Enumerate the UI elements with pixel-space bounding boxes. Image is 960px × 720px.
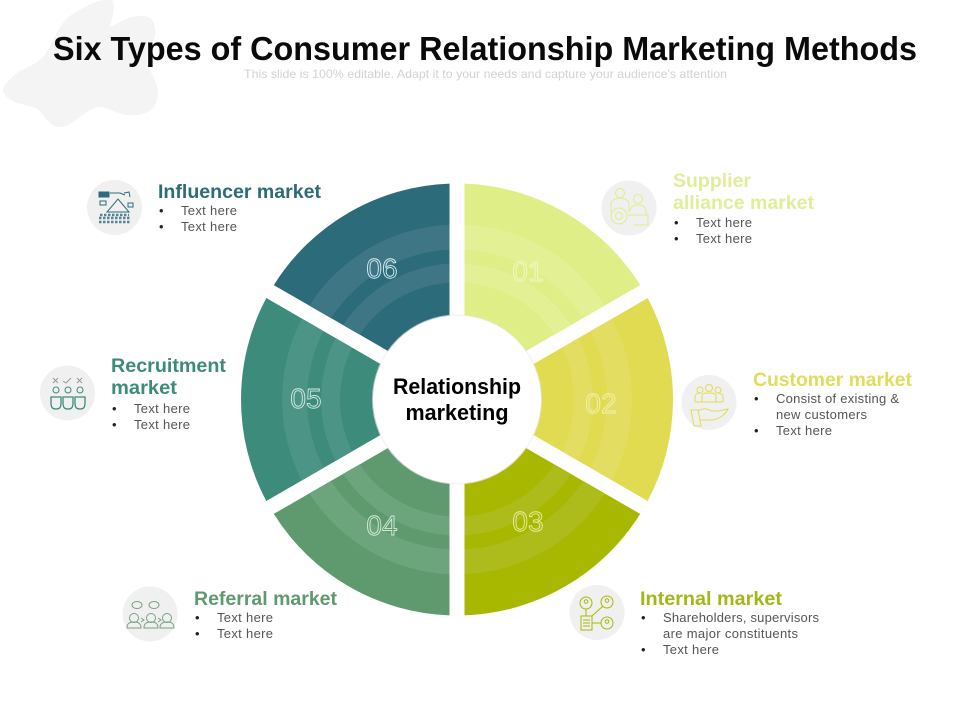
segment 03 — [377, 412, 640, 666]
icon: recruitment — [40, 366, 95, 420]
segment 05: 05 — [290, 383, 322, 414]
segment 01 — [464, 184, 640, 386]
text: internal: • — [641, 642, 646, 657]
segment 04 — [274, 412, 450, 615]
text: referral: • — [195, 626, 200, 641]
text: internal — [641, 610, 820, 657]
text: influencer: • — [159, 203, 164, 218]
text: supplier: Text here — [696, 231, 752, 246]
subtitle: This slide is 100% editable. Adapt it to your needs and capture your audience's attention — [244, 67, 727, 81]
heading: referral: Referral market — [194, 589, 338, 610]
text: supplier: • — [674, 215, 679, 230]
heading: recruitment: Recruitment — [111, 356, 227, 377]
text: recruitment — [112, 401, 190, 432]
icon: supplier — [602, 180, 656, 236]
text: customer: • — [754, 423, 759, 438]
text: supplier: • — [674, 231, 679, 246]
background blob — [3, 0, 158, 127]
text: referral: Text here — [217, 626, 273, 641]
center circle: Relationship — [393, 374, 521, 399]
text: supplier — [674, 215, 752, 246]
text: influencer: Text here — [181, 203, 237, 218]
title: Six Types of Consumer Relationship Marketing Methods — [53, 30, 917, 67]
text: referral — [195, 610, 273, 641]
text: influencer — [159, 203, 237, 234]
heading: supplier — [673, 171, 815, 214]
icon: referral — [122, 586, 178, 642]
heading: recruitment: market — [111, 378, 178, 399]
text: internal: are major constituents — [663, 626, 798, 641]
text: customer: Text here — [776, 423, 832, 438]
heading: supplier: Supplier — [673, 171, 752, 192]
text: customer — [754, 391, 899, 438]
segment 02 — [472, 298, 736, 552]
text: internal: Shareholders, supervisors — [663, 610, 820, 625]
text: recruitment: • — [112, 417, 117, 432]
text: referral: • — [195, 610, 200, 625]
icon: influencer — [87, 180, 142, 235]
icon: internal — [570, 585, 624, 640]
text: recruitment: Text here — [134, 401, 190, 416]
text: customer: Consist of existing & — [776, 391, 899, 406]
heading: customer: Customer market — [753, 370, 913, 391]
segment 06 — [274, 133, 537, 387]
segment 05 — [178, 247, 442, 501]
center circle — [372, 314, 542, 484]
text: customer: • — [754, 391, 759, 406]
segment 04: 04 — [366, 510, 398, 541]
text: internal: • — [641, 610, 646, 625]
segment 02: 02 — [585, 388, 617, 419]
heading: supplier: alliance market — [673, 193, 815, 214]
heading: internal: Internal market — [640, 589, 783, 610]
center circle: marketing — [406, 400, 508, 425]
text: influencer: Text here — [181, 219, 237, 234]
text: recruitment: • — [112, 401, 117, 416]
heading: influencer: Influencer market — [158, 182, 322, 203]
icon: customer — [682, 375, 736, 430]
segment 03: 03 — [512, 506, 544, 537]
text: customer: new customers — [776, 407, 868, 422]
segment 01: 01 — [512, 256, 544, 287]
text: referral: Text here — [217, 610, 273, 625]
text: internal: Text here — [663, 642, 719, 657]
segment 06: 06 — [366, 253, 398, 284]
heading: recruitment — [111, 356, 227, 399]
text: supplier: Text here — [696, 215, 752, 230]
text: recruitment: Text here — [134, 417, 190, 432]
text: influencer: • — [159, 219, 164, 234]
